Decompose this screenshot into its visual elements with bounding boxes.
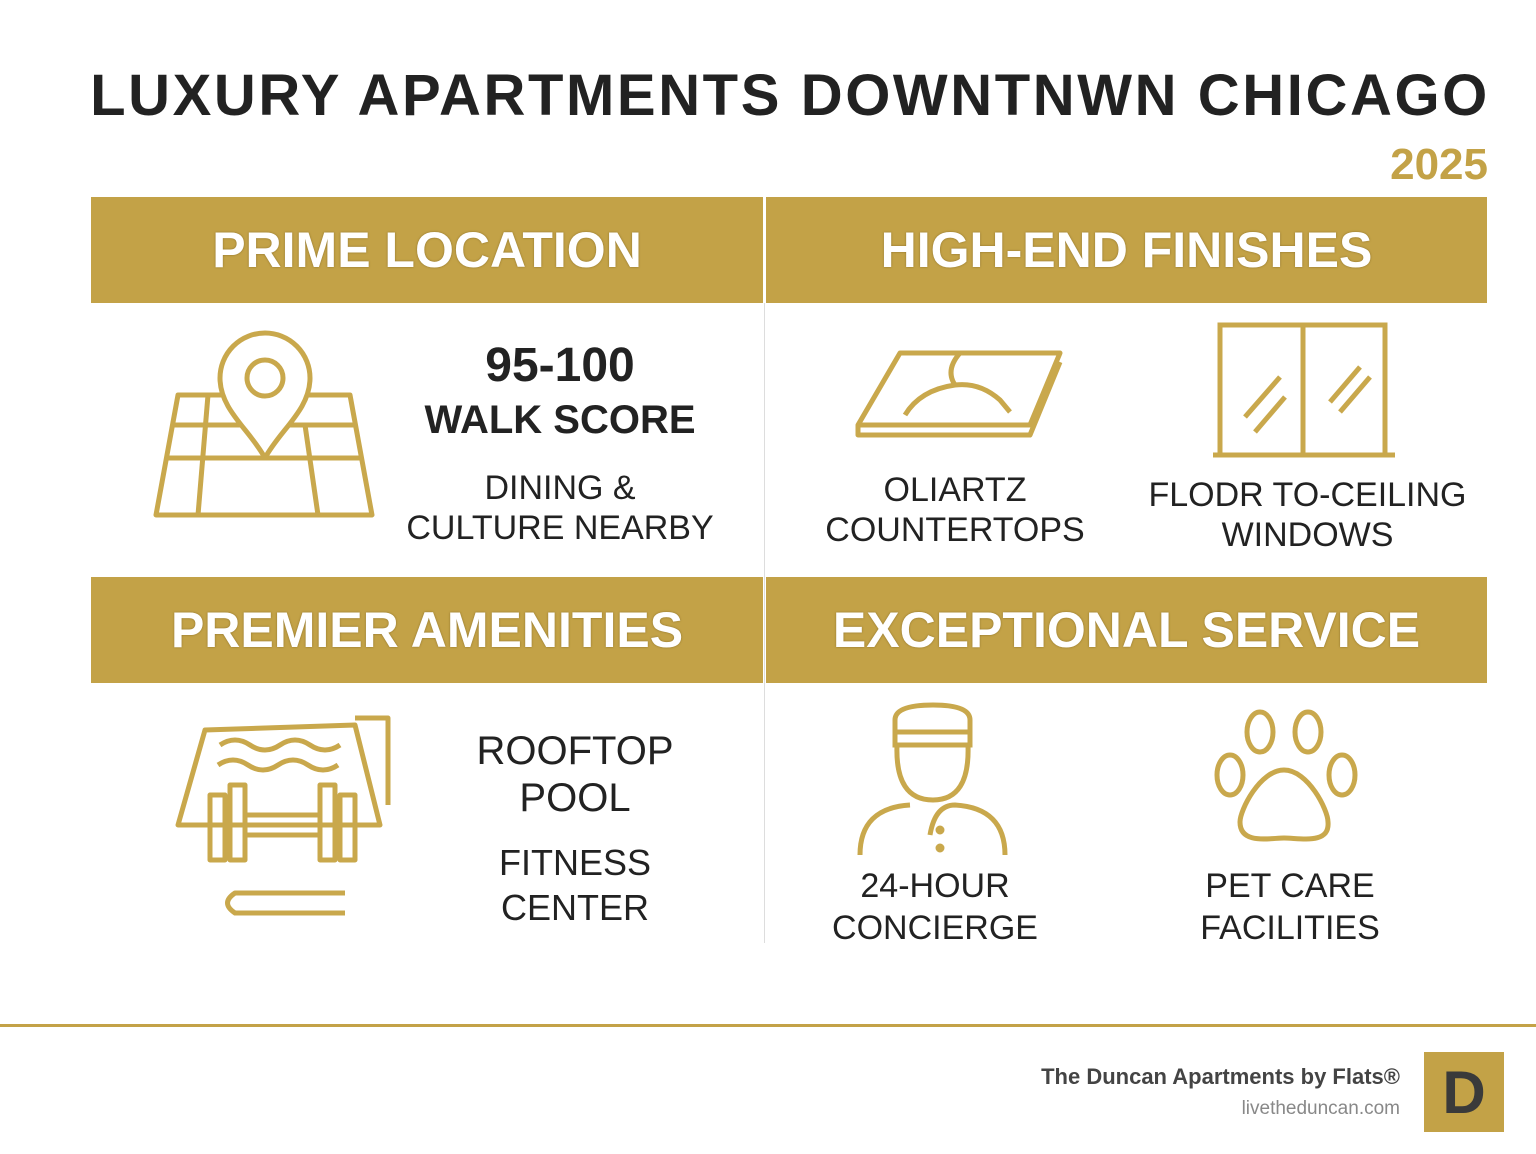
text: countertops: OLIARTZ	[884, 471, 1026, 509]
header: high-end finishes: HIGH-END FINISHES	[881, 222, 1372, 278]
header: high-end finishes	[766, 197, 1487, 303]
text: walk score: 95-100	[485, 339, 635, 392]
text: livetheduncan.com	[1242, 1098, 1400, 1119]
text: countertops	[825, 471, 1085, 549]
text: pool & fitness: POOL	[519, 776, 631, 820]
text: FITNESS	[499, 842, 651, 883]
text: windows	[1148, 476, 1467, 554]
text: CULTURE NEARBY	[406, 509, 714, 547]
text: DINING &	[484, 469, 636, 507]
year: 2025	[1390, 140, 1488, 189]
text: pool & fitness: ROOFTOP	[476, 729, 674, 773]
header: premier amenities: PREMIER AMENITIES	[171, 602, 683, 658]
text: windows: WINDOWS	[1222, 516, 1393, 554]
text: CENTER	[501, 887, 649, 928]
text: countertops: COUNTERTOPS	[825, 511, 1085, 549]
icon: map pin	[154, 330, 374, 518]
title: LUXURY APARTMENTS DOWNTNWN CHICAGO	[90, 63, 1490, 128]
text: concierge	[832, 867, 1038, 947]
logo	[1424, 1052, 1504, 1132]
icon: countertop	[856, 350, 1062, 438]
text: WALK SCORE	[424, 398, 696, 442]
header: prime location	[91, 197, 763, 303]
footer: brand: The Duncan Apartments by Flats®	[1041, 1064, 1400, 1089]
header: exceptional service	[766, 577, 1487, 683]
text: pool & fitness	[476, 729, 674, 820]
header: exceptional service: EXCEPTIONAL SERVICE	[833, 602, 1420, 658]
text: pet care: PET CARE	[1205, 867, 1375, 905]
text: pet care: FACILITIES	[1200, 909, 1380, 947]
text: concierge: CONCIERGE	[832, 909, 1038, 947]
icon: pool/gym	[176, 716, 390, 916]
text: windows: FLODR TO-CEILING	[1148, 476, 1467, 514]
text: pet care	[1200, 867, 1380, 947]
header: prime location: PRIME LOCATION	[212, 222, 642, 278]
header: premier amenities	[91, 577, 763, 683]
logo: D	[1442, 1058, 1486, 1126]
text: concierge: 24-HOUR	[860, 867, 1010, 905]
icon: paw	[1214, 710, 1358, 842]
icon: window	[1213, 322, 1395, 458]
icon: concierge	[858, 702, 1008, 855]
